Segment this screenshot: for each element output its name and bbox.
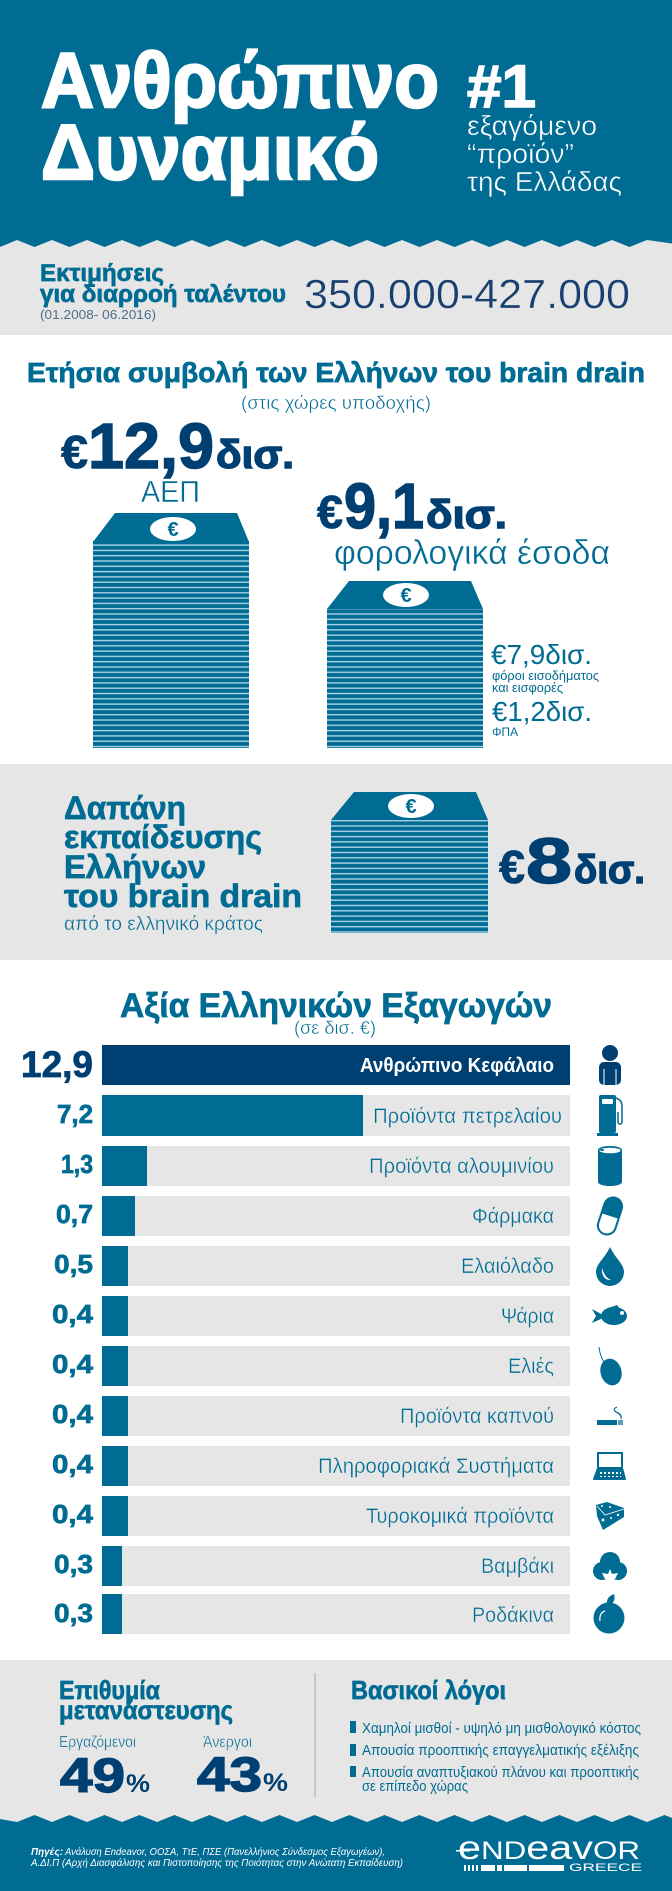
callout: tax revenue 9.1 bn: δισ. <box>426 493 507 537</box>
panel: emigration intent and reasons <box>0 1660 672 1825</box>
heading: desire to emigrate: Επιθυμία <box>59 1675 160 1705</box>
text block: tax breakdown <box>491 639 599 739</box>
heading: annual contribution <box>27 357 645 413</box>
icon: laptop <box>593 1453 626 1480</box>
callout: GDP 12.9 bn <box>61 410 294 509</box>
row: dairy products: Τυροκομικά προϊόντα <box>366 1505 554 1528</box>
panel: footer band <box>0 1815 672 1891</box>
heading: education cost: εκπαίδευσης <box>64 819 262 855</box>
logo: Endeavor Greece: GREECE <box>569 1862 642 1874</box>
callout: 8 bn: δισ. <box>574 848 645 892</box>
icon: cotton <box>593 1552 627 1580</box>
row: pharmaceuticals <box>56 1196 570 1236</box>
text block: estimates label <box>40 260 286 322</box>
row: olives <box>52 1346 570 1386</box>
row: oil products: 7,2 <box>57 1099 93 1129</box>
row: pharmaceuticals: 0,7 <box>56 1199 93 1229</box>
stat: employed 49%: Εργαζόμενοι <box>59 1734 136 1751</box>
callout: 8 bn: € <box>499 841 525 893</box>
heading: #1 exported product: #1 <box>467 53 536 120</box>
row: fish: 0,4 <box>52 1299 94 1329</box>
heading: main reasons: Βασικοί λόγοι <box>351 1675 506 1705</box>
row: fish <box>52 1296 570 1336</box>
callout: GDP 12.9 bn: € <box>61 426 88 478</box>
heading: #1 exported product: εξαγόμενο <box>467 110 597 141</box>
row: olive oil <box>54 1246 570 1286</box>
stat: employed 49% <box>59 1734 150 1803</box>
heading: value of exports: Αξία Ελληνικών Εξαγωγών <box>120 987 552 1025</box>
text block: sources: Πηγές: <box>31 1846 63 1858</box>
row: aluminium products: Προϊόντα αλουμινίου <box>369 1155 554 1178</box>
heading: annual contribution: (στις χώρες υποδοχής) <box>241 393 431 413</box>
icon: money stack tax revenue: € <box>400 585 412 607</box>
text block: sources <box>30 1846 403 1869</box>
row: information systems <box>52 1446 570 1486</box>
heading: #1 exported product <box>467 53 622 197</box>
row: peaches <box>54 1594 570 1634</box>
estimates number: 350.000-427.000 <box>304 271 630 317</box>
callout: tax revenue 9.1 bn: φορολογικά έσοδα <box>334 534 610 572</box>
row: aluminium products: 1,3 <box>61 1149 93 1179</box>
row: olive oil: 0,5 <box>54 1249 93 1279</box>
bar chart: exports <box>21 1044 570 1634</box>
callout: GDP 12.9 bn: δισ. <box>216 433 294 477</box>
text block: sources: Α.ΔΙ.Π (Αρχή Διασφάλισης και Πιστοποίησης της Ποιότητας στην Ανώτατη Εκπαίδευση) <box>30 1857 403 1869</box>
icon: money stack education: € <box>405 796 417 818</box>
stat: employed 49%: 49 <box>60 1750 125 1803</box>
list: reasons: Χαμηλοί μισθοί - υψηλό μη μισθολογικό κόστος <box>362 1720 641 1737</box>
row: information systems: Πληροφοριακά Συστήματα <box>318 1455 554 1478</box>
text block: tax breakdown: φόροι εισοδήματος <box>492 669 599 683</box>
heading: value of exports: (σε δισ. €) <box>294 1018 376 1038</box>
heading: #1 exported product: “προϊόν” <box>467 138 574 169</box>
title: Δυναμικό <box>41 108 379 196</box>
heading: desire to emigrate <box>59 1675 233 1725</box>
list: reasons <box>350 1720 641 1795</box>
stat: unemployed 43%: % <box>263 1769 288 1797</box>
list: reasons: Απουσία προοπτικής επαγγελματικής εξέλιξης <box>362 1742 639 1759</box>
panel: header band <box>0 0 672 335</box>
callout: tax revenue 9.1 bn <box>317 470 610 572</box>
row: tobacco products: Προϊόντα καπνού <box>400 1405 554 1428</box>
row: pharmaceuticals: Φάρμακα <box>472 1205 554 1228</box>
text block: tax breakdown: €7,9δισ. <box>491 639 592 670</box>
text block: tax breakdown: και εισφορές <box>492 681 563 695</box>
text block: estimates label: (01.2008- 06.2016) <box>40 307 156 322</box>
icon: cheese <box>596 1502 624 1530</box>
row: olives: 0,4 <box>52 1349 94 1379</box>
text block: estimates label: για διαρροή ταλέντου <box>40 281 286 308</box>
row: peaches: 0,3 <box>54 1598 93 1628</box>
row: dairy products <box>52 1496 570 1536</box>
row: human capital: 12,9 <box>21 1044 93 1085</box>
icon: pill <box>596 1195 624 1237</box>
text block: sources: Ανάλυση Endeavor, ΟΟΣΑ, ΤτΕ, ΠΣΕ (Πανελλήνιος Σύνδεσμος Εξαγωγέων), <box>64 1846 385 1858</box>
row: human capital: Ανθρώπινο Κεφάλαιο <box>360 1055 554 1077</box>
heading: education cost: από το ελληνικό κράτος <box>64 914 263 935</box>
heading: education cost: Ελλήνων <box>64 849 206 885</box>
title <box>41 36 439 196</box>
icon: money stack education <box>331 792 488 933</box>
callout: GDP 12.9 bn: 12,9 <box>88 410 214 482</box>
stat: unemployed 43% <box>197 1734 288 1802</box>
icon: person <box>599 1045 621 1085</box>
icon: barrel <box>598 1146 622 1186</box>
title: Ανθρώπινο <box>41 36 439 124</box>
row: oil products: Προϊόντα πετρελαίου <box>373 1105 562 1128</box>
icon: peach <box>594 1594 624 1634</box>
icon: money stack tax revenue <box>327 581 483 748</box>
row: oil products <box>57 1095 570 1136</box>
heading: education cost: Δαπάνη <box>64 790 186 826</box>
heading: annual contribution: Ετήσια συμβολή των Ελλήνων του brain drain <box>27 357 645 388</box>
row: tobacco products: 0,4 <box>52 1399 94 1429</box>
row: peaches: Ροδάκινα <box>472 1604 554 1627</box>
heading: education cost <box>64 790 302 935</box>
row: olive oil: Ελαιόλαδο <box>461 1255 554 1278</box>
stat: unemployed 43%: Άνεργοι <box>203 1734 252 1751</box>
row: information systems: 0,4 <box>52 1449 94 1479</box>
row: cotton <box>54 1546 570 1586</box>
logo: Endeavor Greece: eND eav OR <box>458 1829 640 1866</box>
text block: estimates label: Εκτιμήσεις <box>40 260 164 287</box>
row: cotton: 0,3 <box>54 1549 93 1579</box>
row: olives: Ελιές <box>508 1355 554 1378</box>
row: dairy products: 0,4 <box>52 1499 94 1529</box>
heading: education cost: του brain drain <box>64 878 302 914</box>
row: fish: Ψάρια <box>501 1305 554 1328</box>
callout: 8 bn: 8 <box>526 825 572 897</box>
text block: tax breakdown: ΦΠΑ <box>492 725 518 739</box>
icon: oil drop <box>596 1247 624 1286</box>
icon: olive <box>597 1347 625 1388</box>
row: tobacco products <box>52 1396 570 1436</box>
icon: fuel pump <box>597 1095 622 1136</box>
list: reasons: σε επίπεδο χώρας <box>362 1778 468 1795</box>
icon: money stack GDP <box>93 513 249 748</box>
callout: GDP 12.9 bn: ΑΕΠ <box>141 474 200 509</box>
row: human capital <box>21 1044 570 1085</box>
callout: 8 bn <box>499 825 645 897</box>
stat: employed 49%: % <box>126 1770 150 1798</box>
heading: desire to emigrate: μετανάστευσης <box>59 1695 233 1725</box>
list: reasons: Απουσία αναπτυξιακού πλάνου και προοπτικής <box>362 1764 639 1781</box>
panel: education cost <box>0 764 672 960</box>
row: cotton: Βαμβάκι <box>481 1555 554 1578</box>
callout: tax revenue 9.1 bn: 9,1 <box>344 470 424 542</box>
icon: money stack GDP: € <box>167 519 179 541</box>
heading: #1 exported product: της Ελλάδας <box>467 166 622 197</box>
icon: fish <box>592 1305 627 1325</box>
text block: tax breakdown: €1,2δισ. <box>492 696 592 727</box>
panel: talent drain estimates <box>40 260 630 322</box>
callout: tax revenue 9.1 bn: € <box>317 486 343 538</box>
icon: cigarette <box>597 1407 623 1425</box>
stat: unemployed 43%: 43 <box>197 1749 262 1802</box>
row: aluminium products <box>61 1146 570 1186</box>
